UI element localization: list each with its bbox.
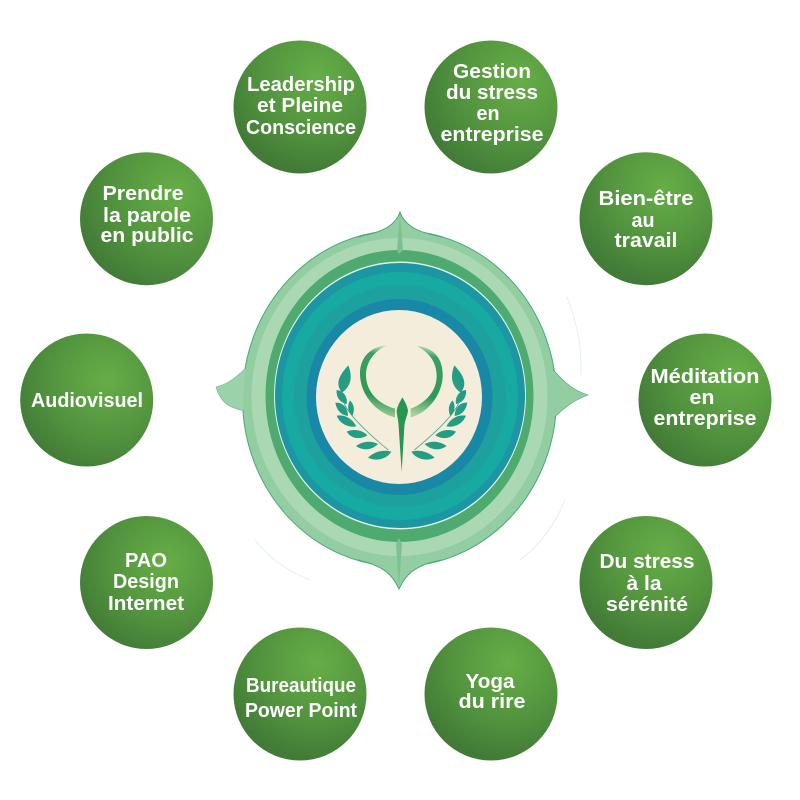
circle: Bien-être au travail: travail (614, 230, 678, 252)
circle: Du stress à la sérénité (580, 516, 712, 649)
circle: Prendre la parole en public: en public (100, 225, 194, 247)
circle: Yoga du rire: du rire (458, 691, 526, 713)
central emblem (216, 212, 588, 589)
top point (358, 212, 442, 252)
right point (550, 366, 588, 422)
central spear (397, 397, 408, 472)
circle: Méditation en entreprise: en (690, 387, 714, 409)
emblem outer ring edge (242, 230, 556, 566)
teal ring (275, 263, 525, 528)
laurel right (411, 365, 467, 460)
blue band (306, 299, 492, 495)
faint brush marks (255, 297, 581, 580)
circle: Gestion du stress en entreprise: du stress (446, 82, 538, 104)
left point (216, 364, 250, 412)
dark green band (266, 250, 534, 542)
teal band (294, 285, 506, 507)
circle: Prendre la parole en public: la parole (103, 205, 191, 227)
circle: Méditation en entreprise (638, 334, 772, 466)
circle: PAO Design Internet (80, 516, 213, 649)
circle: Bureautique Power Point (234, 628, 366, 760)
circle: Leadership et Pleine Conscience: et Pleine (257, 95, 343, 117)
crescent right (411, 346, 443, 417)
point ridges (396, 214, 403, 587)
circle: Gestion du stress en entreprise (424, 40, 558, 174)
circle: PAO Design Internet: Internet (108, 593, 184, 615)
laurel left (335, 365, 391, 460)
circle: Bureautique Power Point: Power Point (245, 700, 357, 722)
circle: Prendre la parole en public (80, 152, 213, 285)
circle: Yoga du rire: Yoga (466, 671, 515, 693)
teal inner band (282, 272, 518, 520)
circle: Leadership et Pleine Conscience: Conscience (246, 117, 356, 139)
circle: PAO Design Internet: Design (113, 571, 179, 593)
circle: Du stress à la sérénité: à la (626, 573, 662, 595)
circle: Audiovisuel (20, 334, 153, 466)
light inner band (252, 238, 548, 556)
circle: Bien-être au travail: Bien-être (598, 188, 694, 210)
cream disc (316, 310, 482, 484)
circle: Prendre la parole en public: Prendre (102, 183, 184, 205)
circle: PAO Design Internet: PAO (125, 550, 167, 572)
bottom point (358, 545, 440, 589)
circle: Méditation en entreprise: Méditation (650, 366, 760, 388)
circle: Gestion du stress en entreprise: Gestion (453, 61, 531, 83)
circle: Bien-être au travail (580, 152, 712, 285)
circle: Leadership et Pleine Conscience (234, 40, 366, 174)
circle: Yoga du rire (424, 628, 558, 760)
logo symbol (335, 345, 467, 472)
crescent left (360, 345, 395, 417)
circle: Bureautique Power Point: Bureautique (246, 675, 356, 697)
outer ring fill (244, 232, 556, 566)
circle: Gestion du stress en entreprise: en (476, 103, 500, 125)
circle: Audiovisuel: Audiovisuel (31, 390, 143, 412)
circle: Leadership et Pleine Conscience: Leadership (247, 74, 355, 96)
circle: Du stress à la sérénité: sérénité (606, 594, 688, 616)
circle: Gestion du stress en entreprise: entreprise (440, 124, 544, 146)
white separator ring (274, 262, 526, 530)
circle: Bien-être au travail: au (632, 210, 654, 232)
circle: Du stress à la sérénité: Du stress (600, 551, 694, 573)
circle: Méditation en entreprise: entreprise (654, 408, 756, 430)
